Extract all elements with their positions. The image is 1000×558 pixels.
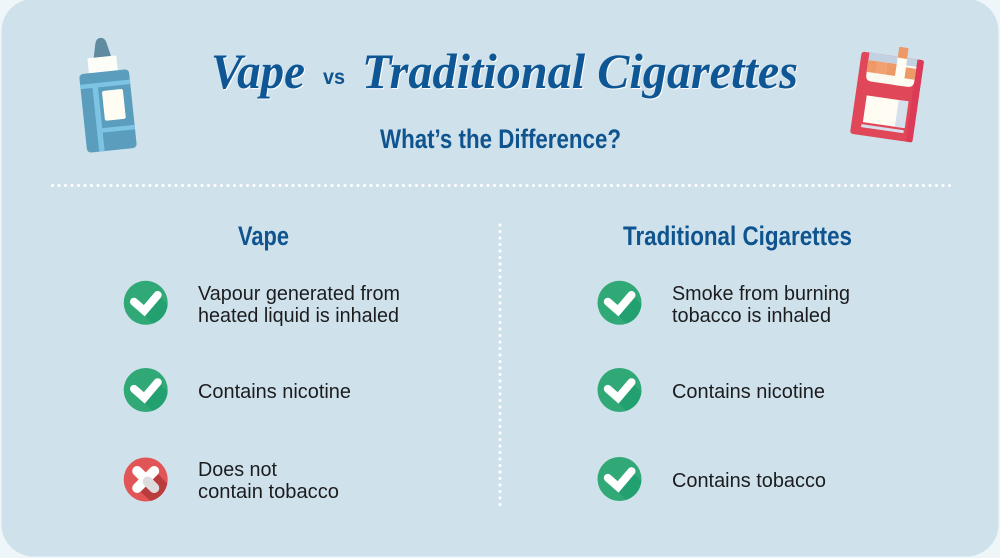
title: Vape	[212, 44, 306, 100]
text: tobacco: Does not	[198, 459, 277, 481]
text: nicotine: Contains nicotine	[672, 381, 825, 403]
title: vs	[323, 66, 345, 89]
panel: cigarettes column	[598, 221, 852, 501]
title: Vape	[211, 43, 305, 99]
title: Traditional Cigarettes	[362, 43, 798, 99]
icon: check smoke	[598, 281, 642, 325]
text: smoke: Smoke from burning	[672, 283, 850, 305]
text: tobacco: Contains tobacco	[672, 470, 826, 492]
icon: check nicotine	[124, 368, 168, 412]
text: smoke: tobacco is inhaled	[672, 305, 831, 327]
text: vapour: Vapour generated from	[198, 283, 400, 305]
text: nicotine: Contains nicotine	[198, 381, 351, 403]
heading: traditional cigarettes: Traditional Cigarettes	[623, 221, 852, 251]
icon: cigarette pack	[850, 42, 926, 143]
panel: vape column	[124, 221, 400, 503]
icon: cross tobacco	[124, 458, 168, 502]
title: Traditional Cigarettes	[363, 44, 799, 100]
text: tobacco: contain tobacco	[198, 481, 339, 503]
icon: vape bottle	[75, 35, 137, 153]
icon: check vapour	[124, 281, 168, 325]
icon: check tobacco	[598, 457, 642, 501]
heading: vape: Vape	[238, 221, 289, 251]
subtitle: What’s the Difference?	[380, 124, 621, 154]
icon: check nicotine	[598, 368, 642, 412]
text: vapour: heated liquid is inhaled	[198, 305, 399, 327]
